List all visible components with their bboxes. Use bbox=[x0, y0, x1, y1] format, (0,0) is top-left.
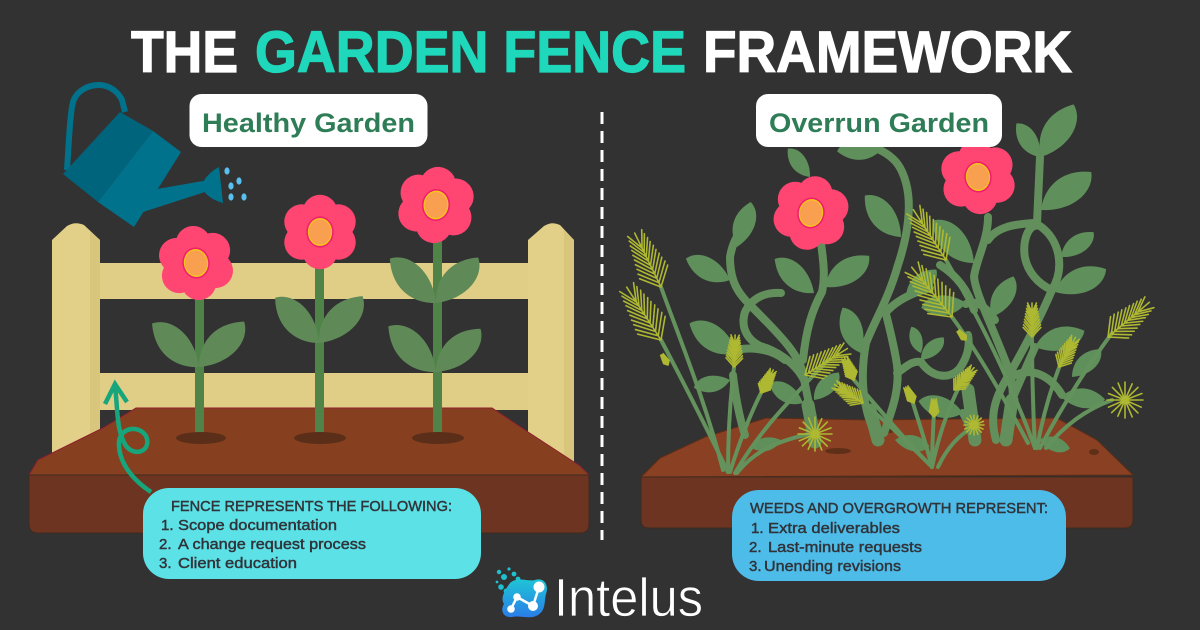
flower one bbox=[768, 169, 854, 257]
flower two bbox=[939, 136, 1017, 218]
callout: fence represents: Client education bbox=[178, 555, 297, 572]
icon: watering can bbox=[63, 85, 247, 227]
logo: Intelus bbox=[496, 567, 703, 628]
callout: weeds and overgrowth bbox=[732, 490, 1066, 581]
callout: fence represents: 2. bbox=[159, 536, 172, 553]
callout: weeds and overgrowth: 3. bbox=[749, 558, 762, 575]
logo wordmark: Intelus bbox=[554, 568, 703, 628]
icon: logo mark bbox=[496, 567, 547, 617]
callout: fence represents: 1. bbox=[161, 517, 174, 534]
weeds bbox=[613, 201, 1158, 473]
callout: fence represents bbox=[143, 488, 481, 579]
arrow: to fence bbox=[105, 384, 151, 492]
flower right bbox=[379, 163, 490, 444]
divider bbox=[600, 112, 604, 540]
title: THE bbox=[131, 20, 238, 85]
callout: fence represents: Scope documentation bbox=[178, 517, 337, 534]
callout: weeds and overgrowth: 1. bbox=[751, 520, 764, 537]
label: healthy garden: Healthy Garden bbox=[202, 108, 415, 138]
soil bed bbox=[641, 418, 1133, 528]
callout: fence represents: 3. bbox=[159, 555, 172, 572]
callout: weeds and overgrowth: WEEDS AND OVERGROWTH REPRESENT: bbox=[750, 500, 1048, 517]
callout: weeds and overgrowth: Unending revisions bbox=[764, 558, 901, 575]
title: FRAMEWORK bbox=[703, 20, 1072, 85]
flower middle bbox=[265, 195, 373, 444]
soil bed bbox=[29, 408, 589, 533]
callout: fence represents: FENCE REPRESENTS THE FOLLOWING: bbox=[171, 498, 452, 515]
flower left bbox=[143, 221, 255, 444]
vines and leaves bbox=[681, 97, 1111, 455]
panel: healthy garden bbox=[29, 85, 589, 579]
label: overrun garden: Overrun Garden bbox=[769, 108, 989, 138]
fence bbox=[52, 223, 574, 470]
label: healthy garden bbox=[190, 94, 428, 147]
title bbox=[131, 20, 1072, 85]
callout: weeds and overgrowth: 2. bbox=[749, 539, 762, 556]
callout: fence represents: A change request process bbox=[178, 536, 366, 553]
panel: overrun garden bbox=[613, 94, 1158, 581]
callout: weeds and overgrowth: Extra deliverables bbox=[768, 520, 900, 537]
icon: water drops bbox=[224, 167, 247, 201]
label: overrun garden bbox=[756, 94, 1002, 147]
title: GARDEN FENCE bbox=[255, 20, 686, 85]
callout: weeds and overgrowth: Last-minute requests bbox=[768, 539, 922, 556]
